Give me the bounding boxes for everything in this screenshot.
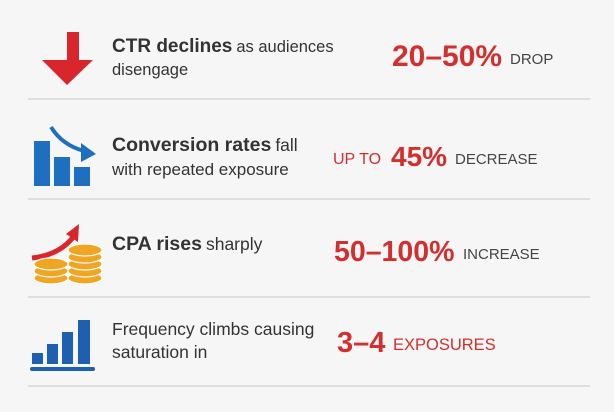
icon: red down arrow <box>42 32 93 85</box>
stat: 20-50% drop: 20–50% <box>392 40 502 73</box>
text: CTR declines: disengage <box>112 61 188 79</box>
icon: bar chart with falling arrow <box>34 127 96 186</box>
text: frequency climbs: saturation in <box>112 342 207 362</box>
stat: 20-50% drop: DROP <box>510 51 553 68</box>
stat: 50-100% increase: 50–100% <box>334 236 454 268</box>
stat: up to 45%: UP TO <box>333 151 381 168</box>
text: CPA rises: CPA risessharply <box>112 233 263 255</box>
stat: 50-100% increase: INCREASE <box>463 246 540 263</box>
text: conversion rates: with repeated exposure <box>111 160 289 179</box>
stat: 3-4 exposures: 3–4 <box>337 327 385 359</box>
text: frequency climbs: Frequency climbs causing <box>112 319 314 339</box>
text: CTR declines <box>112 36 334 79</box>
text: CTR declines: CTR declinesas audiences <box>112 36 334 57</box>
stat: 3-4 exposures: EXPOSURES <box>393 336 496 354</box>
stat: up to 45% <box>333 141 538 172</box>
stat: 3-4 exposures <box>337 327 496 359</box>
text: conversion rates <box>111 134 298 179</box>
icon: rising bar chart <box>30 320 95 371</box>
icon: coins with rising arrow <box>32 224 102 284</box>
stat: 20-50% drop <box>392 40 553 73</box>
stat: up to 45%: DECREASE <box>455 151 538 168</box>
stat: 50-100% increase <box>334 236 540 268</box>
stat: up to 45%: 45% <box>391 141 447 172</box>
text: conversion rates: Conversion ratesfall <box>112 134 298 156</box>
text: frequency climbs <box>112 319 314 362</box>
